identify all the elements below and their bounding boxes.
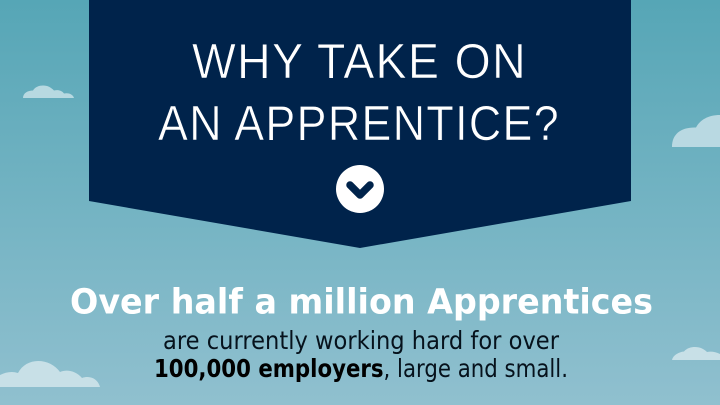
icon: cloud top left: [23, 86, 74, 98]
title banner: [89, 0, 631, 248]
text block: supporting statement: are currently working hard for over: [163, 326, 560, 355]
icon: chevron down button: [336, 165, 384, 213]
title: AN APPRENTICE?: [158, 97, 560, 151]
heading: Over half a million Apprentices: [70, 282, 653, 322]
title: WHY TAKE ON: [192, 35, 527, 89]
icon: cloud bottom right: [672, 347, 720, 360]
text block: supporting statement: [154, 326, 568, 383]
text block: supporting statement: 100,000 employers, large and small.: [154, 354, 568, 383]
icon: cloud right: [672, 115, 720, 147]
icon: cloud bottom left: [0, 361, 100, 387]
title: [158, 35, 560, 151]
